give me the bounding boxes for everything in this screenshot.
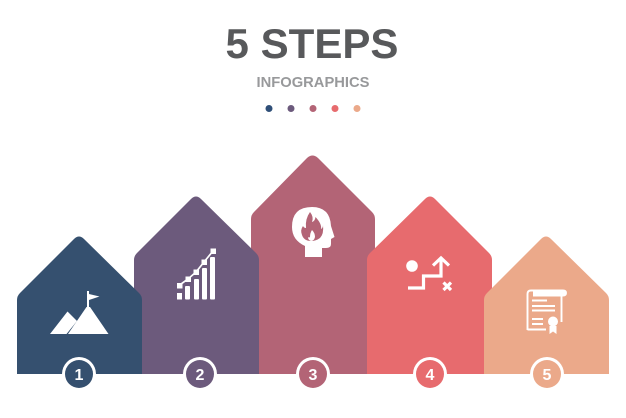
panel: step 3 [251, 156, 375, 374]
badge 3 [296, 357, 330, 391]
badge 2 [183, 357, 217, 391]
icon: mountain with flag [50, 291, 108, 334]
badge 3: 3 [309, 367, 318, 384]
subtitle: INFOGRAPHICS [256, 74, 370, 91]
icon: head with flame [292, 207, 334, 257]
icon: certificate [528, 290, 566, 334]
badge 2: 2 [196, 367, 205, 384]
icon: growth chart [177, 248, 216, 300]
panel: step 2 [134, 196, 259, 374]
legend dots [266, 105, 360, 112]
badge 5 [530, 357, 564, 391]
panel: step 1 [17, 236, 142, 374]
panel: step 4 [367, 196, 492, 374]
badge 4: 4 [426, 367, 435, 384]
icon: stairs with arrow [406, 258, 451, 290]
badge 4 [413, 357, 447, 391]
panel: step 5 [484, 236, 609, 374]
badge 1 [62, 357, 96, 391]
badge 5: 5 [543, 367, 552, 384]
title: 5 STEPS [226, 20, 398, 67]
badge 1: 1 [75, 367, 84, 384]
